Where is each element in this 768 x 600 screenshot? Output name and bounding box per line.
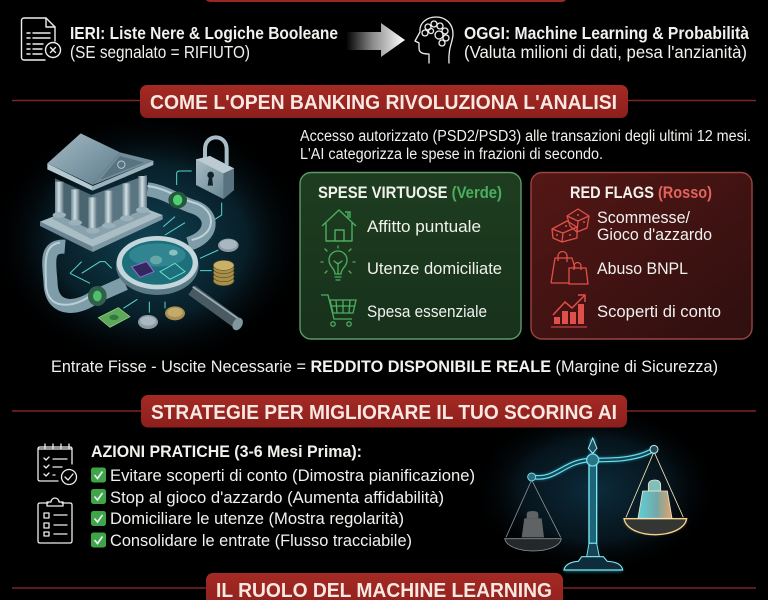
label: abuso bnpl: Abuso BNPL	[597, 260, 688, 278]
label: scommesse: Scommesse/	[597, 209, 690, 227]
oggi text	[464, 23, 749, 62]
icon: calendar checklist	[38, 444, 76, 484]
label: scommesse	[597, 209, 712, 244]
item 4: Consolidare le entrate (Flusso tracciabile)	[110, 531, 412, 550]
heading: machine learning	[12, 573, 756, 600]
bank base	[40, 195, 163, 252]
intro text	[300, 128, 751, 163]
pipe valves	[168, 192, 187, 208]
icon: shopping bags	[551, 252, 588, 284]
formula: Entrate Fisse - Uscite Necessarie = REDDITO DISPONIBILE REALE (Margine di Sicurezza)	[51, 358, 718, 376]
magnifier handle	[192, 290, 238, 324]
padlock	[205, 137, 227, 165]
icon: rejected document	[22, 18, 60, 60]
label: spesa: Spesa essenziale	[367, 303, 487, 321]
panel: red flags	[531, 172, 752, 339]
coins	[218, 239, 239, 252]
label: scommesse: Gioco d'azzardo	[597, 226, 712, 244]
columns	[55, 176, 147, 231]
panel heading red: RED FLAGS (Rosso)	[570, 184, 712, 202]
left pan	[505, 480, 561, 551]
icon: house	[322, 210, 356, 241]
item 2: Stop al gioco d'azzardo (Aumenta affidabilità)	[110, 488, 444, 507]
heading: open banking: COME L'OPEN BANKING RIVOLUZIONA L'ANALISI	[150, 91, 617, 114]
panel heading green: SPESE VIRTUOSE (Verde)	[318, 184, 502, 202]
left pipe	[49, 247, 125, 306]
beam	[532, 449, 654, 477]
item 1: Evitare scoperti di conto (Dimostra pianificazione)	[110, 466, 475, 485]
intro text: L'AI categorizza le spese in frazioni di secondo.	[300, 146, 603, 163]
arrow	[346, 23, 405, 57]
comparison: yesterday vs today	[22, 17, 749, 63]
ieri text	[70, 23, 338, 62]
icon: rising chart	[551, 295, 587, 327]
post	[589, 465, 597, 543]
list heading: AZIONI PRATICHE (3-6 Mesi Prima):	[91, 443, 362, 461]
ieri text: (SE segnalato = RIFIUTO)	[70, 42, 250, 62]
icon: clipboard checklist	[38, 498, 72, 543]
icon: dice	[552, 209, 589, 242]
right pipe	[147, 189, 209, 244]
glow layer	[532, 438, 654, 569]
illustration: neon scale	[470, 405, 720, 575]
roof	[47, 163, 93, 191]
bank walls	[55, 178, 92, 230]
base	[587, 543, 599, 557]
heading: open banking	[12, 85, 756, 118]
top banner remnant	[205, 0, 567, 2]
icon: shopping cart	[321, 295, 356, 326]
actions list	[91, 443, 475, 550]
heading: strategie: STRATEGIE PER MIGLIORARE IL TUO SCORING AI	[151, 401, 617, 424]
ieri text: IERI: Liste Nere & Logiche Booleane	[70, 23, 338, 43]
label: affitto: Affitto puntuale	[367, 218, 481, 236]
label: utenze: Utenze domiciliate	[367, 260, 502, 278]
oggi text: (Valuta milioni di dati, pesa l'anzianità)	[464, 42, 747, 62]
label: scoperti: Scoperti di conto	[597, 303, 721, 321]
heading: strategie	[12, 395, 756, 428]
item 3: Domiciliare le utenze (Mostra regolarità)	[110, 509, 404, 528]
icon: head with brain	[415, 17, 453, 63]
right pan	[624, 452, 687, 535]
panel: spese virtuose	[300, 172, 521, 339]
illustration: open banking pipes	[0, 112, 310, 368]
magnifier	[116, 236, 199, 295]
icon: light bulb	[321, 246, 355, 280]
connector lines	[70, 171, 222, 313]
